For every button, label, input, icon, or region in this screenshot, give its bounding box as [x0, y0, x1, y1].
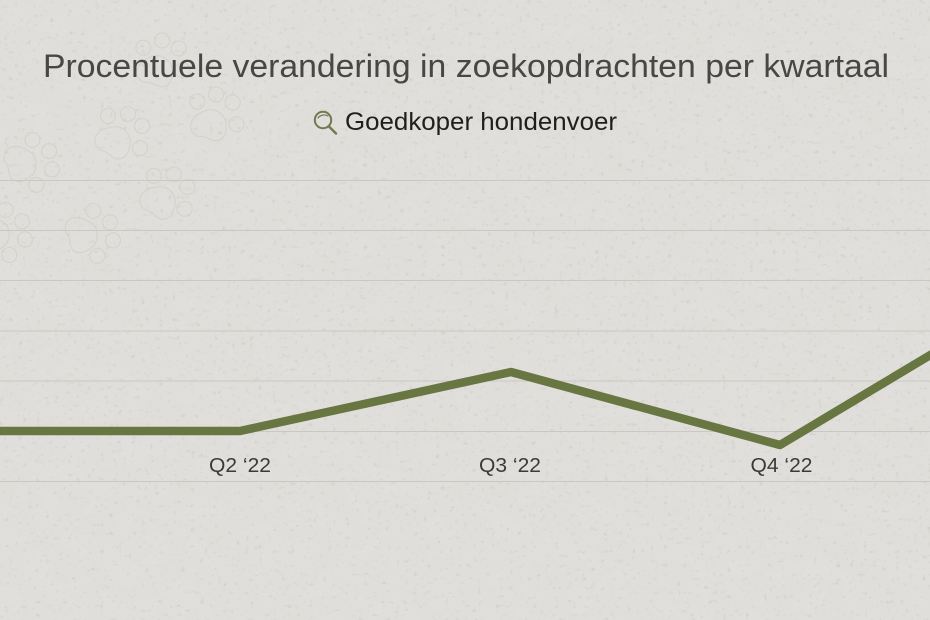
legend label: Goedkoper hondenvoer: [345, 108, 617, 136]
chart gridlines: [0, 180, 930, 482]
data line: Goedkoper hondenvoer: [0, 354, 930, 445]
title: Procentuele verandering in zoekopdrachten per kwartaal: [43, 48, 889, 84]
icon: magnifying glass: [315, 112, 336, 134]
label: Q2: Q2 ‘22: [209, 454, 271, 477]
legend: [315, 108, 617, 136]
x-axis labels: [209, 454, 812, 477]
label: Q3: Q3 ‘22: [479, 454, 541, 477]
decorative paw prints: [0, 28, 249, 271]
label: Q4: Q4 ‘22: [750, 454, 812, 477]
